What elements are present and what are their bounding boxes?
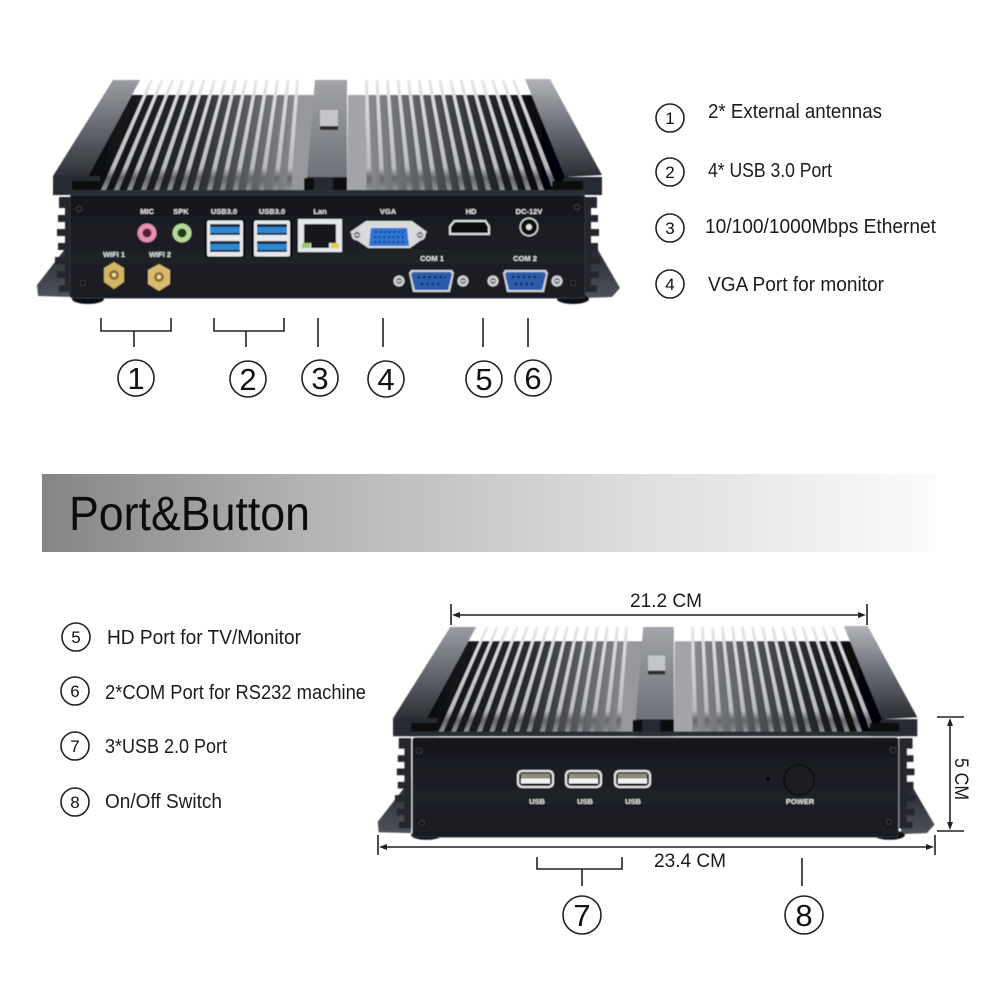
feature list: items 5 to 8: 6 xyxy=(70,682,80,701)
USB 3.0 ports: USB3.0 xyxy=(211,207,237,216)
callout numbers, rear view: 5 xyxy=(475,362,493,397)
callout number 8 xyxy=(785,896,823,934)
feature list: items 5 to 8: 2*COM Port for RS232 machine xyxy=(105,682,366,704)
feature list: items 1 to 4: 2* External antennas xyxy=(708,101,882,123)
feature list: items 5 to 8: 5 xyxy=(71,628,81,647)
callout numbers, rear view: 1 xyxy=(127,361,145,396)
feature list: items 5 to 8: 8 xyxy=(70,793,80,812)
LAN port xyxy=(298,207,342,252)
feature list: items 5 to 8: On/Off Switch xyxy=(105,791,222,813)
COM ports: COM 1 xyxy=(420,254,444,263)
USB 2.0 ports: USB xyxy=(625,797,641,806)
HDMI port xyxy=(449,207,490,235)
pointer line: power button xyxy=(801,858,803,886)
USB 2.0 ports: USB xyxy=(529,797,545,806)
feature list: items 5 to 8: HD Port for TV/Monitor xyxy=(107,627,301,649)
feature list: items 1 to 4: 4* USB 3.0 Port xyxy=(708,160,832,182)
power button: POWER xyxy=(786,797,815,806)
VGA port: VGA xyxy=(380,207,397,216)
LAN port: Lan xyxy=(313,207,327,216)
section banner: Port&Button: Port&Button xyxy=(69,488,310,541)
callout numbers, rear view: 6 xyxy=(524,361,542,396)
feature list: items 1 to 4: 3 xyxy=(665,219,675,238)
power button xyxy=(766,765,815,806)
feature list: items 1 to 4: 10/100/1000Mbps Ethernet xyxy=(705,216,936,238)
callout numbers, rear view: 3 xyxy=(311,361,329,396)
feature list: items 1 to 4: 2 xyxy=(665,163,675,182)
device photo: front view xyxy=(378,626,934,840)
antenna connectors: WIFI 1 and WIFI 2: WIFI 1 xyxy=(103,250,125,259)
feature list: items 5 to 8: 7 xyxy=(70,737,80,756)
feature list: items 1 to 4 xyxy=(656,101,936,298)
dimension: width 21.2 CM xyxy=(451,591,867,625)
VGA port xyxy=(350,207,427,248)
callout numbers, rear view: 2 xyxy=(239,362,257,397)
feature list: items 1 to 4: 4 xyxy=(665,275,675,294)
antenna connectors: WIFI 1 and WIFI 2: WIFI 2 xyxy=(149,250,171,259)
device photo: rear view with ports xyxy=(37,79,620,304)
feature list: items 5 to 8: 3*USB 2.0 Port xyxy=(105,736,227,758)
USB 2.0 ports: USB xyxy=(577,797,593,806)
USB 3.0 ports: USB3.0 xyxy=(259,207,285,216)
dimension: width 21.2 CM: 21.2 CM xyxy=(630,591,702,612)
callout number 7 xyxy=(563,896,601,934)
feature list: items 5 to 8 xyxy=(61,623,366,816)
section banner: Port&Button xyxy=(42,474,936,552)
dimension: depth 23.4 CM xyxy=(378,835,935,872)
COM ports: COM 2 xyxy=(513,254,537,263)
front panel xyxy=(413,738,898,837)
rear port panel xyxy=(70,195,585,298)
feature list: items 1 to 4: VGA Port for monitor xyxy=(708,274,884,296)
chassis: heat-sink body, front view xyxy=(378,626,934,840)
DC power jack xyxy=(516,207,542,236)
audio jacks: MIC and SPK xyxy=(138,207,192,242)
callout numbers, rear view xyxy=(118,360,551,397)
callout number 8: 8 xyxy=(795,898,813,933)
dimension: height 5 CM xyxy=(937,717,971,831)
audio jacks: MIC and SPK: SPK xyxy=(173,207,189,216)
HDMI port: HD xyxy=(466,207,477,216)
feature list: items 1 to 4: 1 xyxy=(665,109,675,128)
DC power jack: DC-12V xyxy=(516,207,542,216)
callout numbers, rear view: 4 xyxy=(377,362,395,397)
port pointer brackets, rear view xyxy=(101,318,528,347)
callout number 7: 7 xyxy=(573,898,591,933)
audio jacks: MIC and SPK: MIC xyxy=(140,207,154,216)
chassis: heat-sink body xyxy=(37,79,620,304)
dimension: height 5 CM: 5 CM xyxy=(950,758,971,800)
USB 2.0 ports xyxy=(517,770,651,806)
dimension: depth 23.4 CM: 23.4 CM xyxy=(654,851,726,872)
USB 3.0 ports xyxy=(205,207,292,258)
COM ports xyxy=(394,254,562,292)
pointer bracket: USB 2.0 ports xyxy=(537,857,622,886)
antenna connectors: WIFI 1 and WIFI 2 xyxy=(103,250,171,291)
